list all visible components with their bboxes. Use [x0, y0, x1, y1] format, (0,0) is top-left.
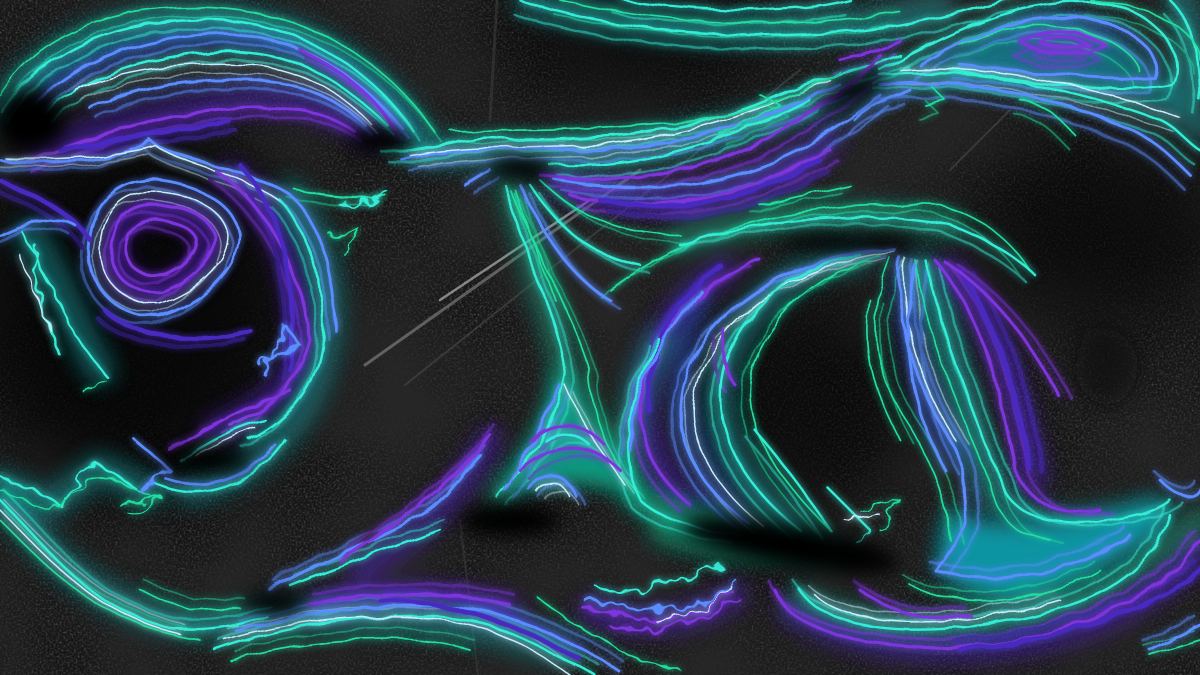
bundle: left ring with purple eye: [0, 140, 385, 440]
teal filled pools: [495, 10, 1167, 600]
lightning: left edge and lower-left: [0, 195, 390, 515]
bundle: ring lower arc: [150, 390, 290, 492]
bundle: top-right loops: [520, 0, 1200, 175]
bundle: top-left arcs: [0, 8, 435, 162]
bundle: bottom right sweep: [775, 480, 1200, 655]
dark nodes where streams converge: [0, 64, 920, 614]
bundle: central star shape: [465, 170, 680, 497]
bundle: central horizontal stream: [380, 55, 900, 206]
bundle: bottom centre ribbons: [540, 490, 900, 670]
paper creases: [365, 0, 1010, 675]
bundle: central big arcs: [610, 185, 1035, 535]
bundle: bottom-left sweep: [0, 435, 620, 675]
bundle: right fan: [867, 258, 1170, 570]
